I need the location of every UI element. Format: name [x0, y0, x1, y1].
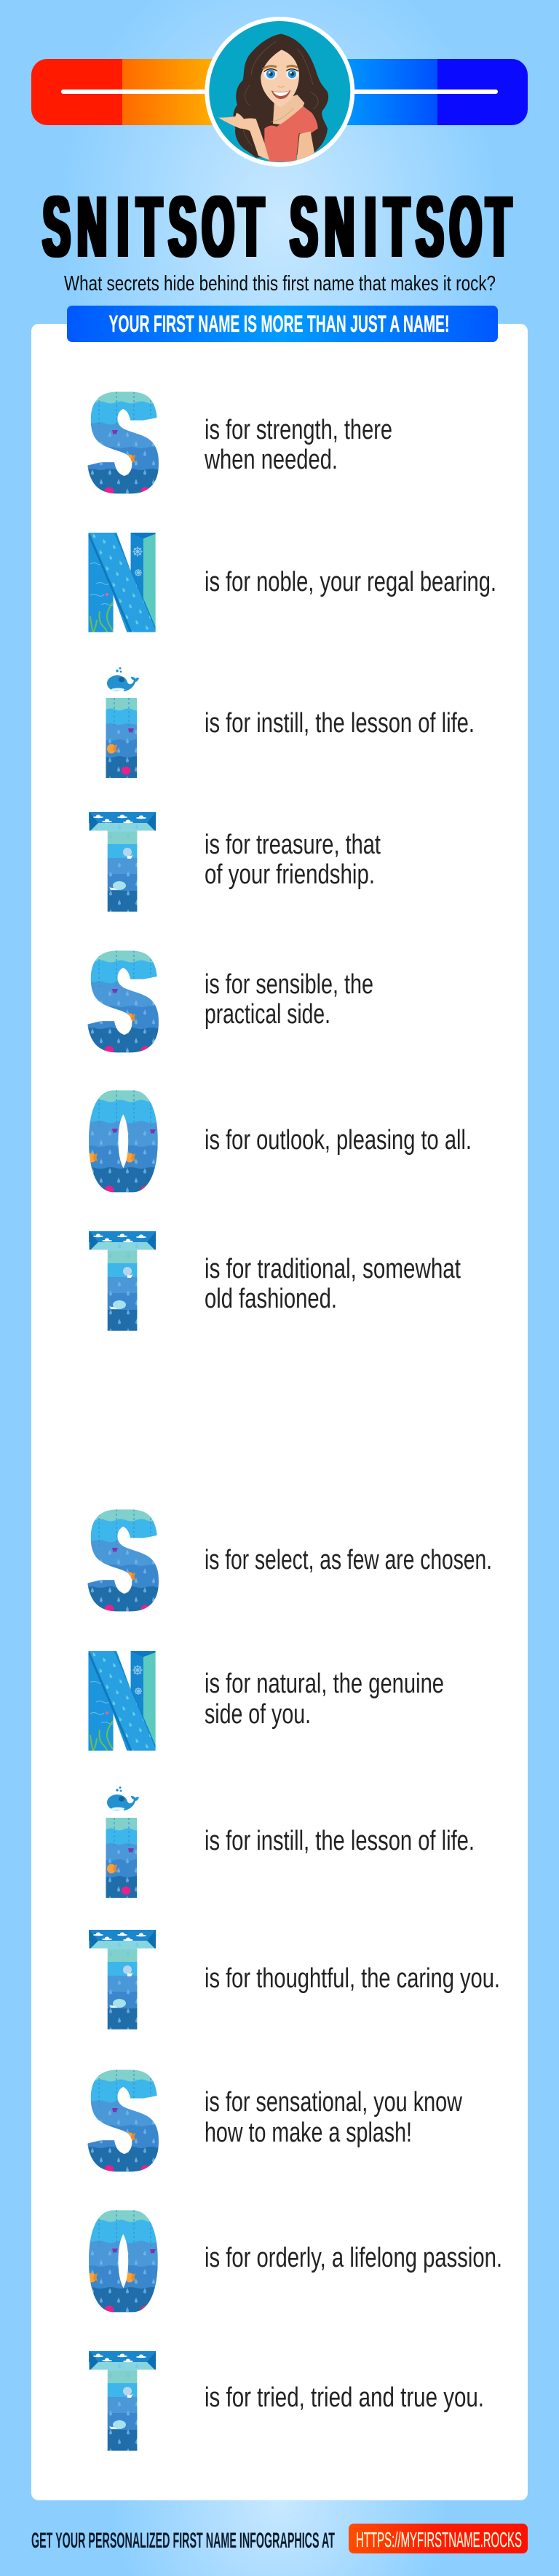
white content panel — [31, 324, 528, 2500]
text: sensational — [205, 2087, 462, 2148]
letter S — [87, 2070, 159, 2171]
text: sensible — [205, 969, 373, 1030]
title: SNITSOT — [43, 178, 263, 274]
row 7: T — [86, 1228, 461, 1337]
letter N — [88, 1651, 156, 1751]
text: sensible: practical side. — [205, 999, 330, 1030]
letter I — [106, 698, 137, 778]
row 8: S — [87, 1509, 491, 1611]
letter O — [89, 2210, 158, 2313]
text: instill: is for instill, the lesson of life. — [205, 1826, 475, 1856]
whale dot — [107, 667, 139, 691]
row 4: T — [86, 808, 381, 918]
text: sensational: how to make a splash! — [205, 2118, 412, 2148]
text: strength — [204, 415, 392, 475]
text: traditional — [205, 1254, 461, 1314]
row 2: N — [85, 529, 496, 638]
whale dot — [107, 1786, 139, 1810]
letter T — [89, 812, 156, 912]
title: SNITSOT — [290, 178, 512, 274]
row 5: S — [87, 950, 373, 1052]
letter N — [88, 533, 156, 632]
row 6: O — [89, 1090, 470, 1192]
row 12: S — [87, 2070, 462, 2171]
letter S — [87, 950, 159, 1052]
row 1: S — [87, 391, 392, 493]
portrait badge: smiling brunette woman — [205, 17, 354, 167]
text: instill: is for instill, the lesson of life. — [205, 708, 475, 739]
text: tried: is for tried, tried and true you. — [205, 2382, 484, 2413]
letter I — [106, 1818, 137, 1898]
letter T — [89, 1930, 156, 2030]
letter S — [87, 1509, 159, 1611]
text: traditional: is for traditional, somewhat — [205, 1254, 461, 1284]
letter T — [89, 2351, 156, 2451]
text: strength: when needed. — [204, 445, 338, 475]
text: natural: is for natural, the genuine — [205, 1669, 444, 1699]
text: traditional: old fashioned. — [205, 1284, 337, 1314]
row 14: T — [86, 2348, 484, 2457]
text: natural: side of you. — [205, 1699, 311, 1730]
text: sensible: is for sensible, the — [205, 969, 373, 1000]
row 3: I — [98, 667, 475, 782]
text: treasure: is for treasure, that — [205, 830, 381, 860]
header ribbon bar — [31, 59, 528, 125]
text: sensational: is for sensational, you know — [205, 2087, 462, 2118]
row 13: O — [89, 2210, 501, 2313]
row 11: T — [86, 1926, 500, 2035]
banner: tagline — [67, 306, 498, 342]
text: strength: is for strength, there — [205, 415, 392, 445]
footer URL button — [349, 2524, 528, 2553]
text: treasure: of your friendship. — [205, 859, 375, 890]
text: treasure — [205, 830, 381, 890]
letter S — [87, 391, 159, 493]
text: natural — [205, 1669, 444, 1730]
letter T — [89, 1231, 156, 1331]
letter O — [89, 1090, 158, 1192]
title — [43, 178, 512, 274]
text: outlook: is for outlook, pleasing to all. — [205, 1125, 472, 1156]
row 9: N — [85, 1647, 444, 1757]
row 10: I — [98, 1786, 475, 1901]
